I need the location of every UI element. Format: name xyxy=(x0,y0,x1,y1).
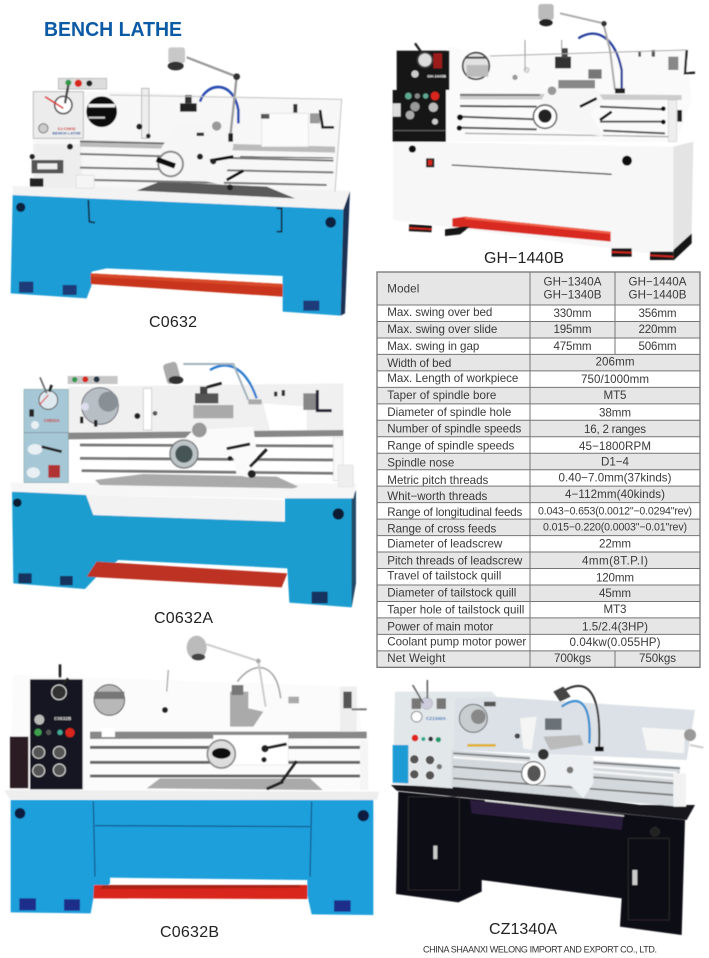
bed and rods xyxy=(452,750,686,807)
caption: GH-1440B: GH−1440B xyxy=(484,250,564,267)
row: pitch threads of leadscrew xyxy=(377,552,700,569)
row: max swing over slide: 195mm xyxy=(554,323,592,336)
row: max length of workpiece: 750/1000mm xyxy=(581,373,649,386)
row: range of longitudinal feeds: 0.043−0.653(0.0012"−0.0294"rev) xyxy=(538,505,692,517)
row: max swing in gap xyxy=(387,340,676,353)
row: max swing over slide: Max. swing over slide xyxy=(387,323,497,336)
row: power of main motor xyxy=(377,618,700,634)
bed and rods xyxy=(457,93,682,142)
chuck xyxy=(80,388,118,427)
row: max length of workpiece xyxy=(387,372,649,386)
machine: C0632A blue lathe xyxy=(10,361,357,607)
work lamp xyxy=(168,47,240,142)
row: max swing over bed: 330mm xyxy=(554,307,592,320)
coolant hose xyxy=(200,87,238,123)
row: range of longitudinal feeds xyxy=(387,505,692,519)
row: pitch threads of leadscrew: 4mm(8T.P.I) xyxy=(582,554,648,567)
headstock xyxy=(393,680,497,788)
coolant hose xyxy=(578,34,622,88)
headstock: BENCH LATHE xyxy=(53,131,81,136)
machine: GH-1440B white lathe xyxy=(393,4,695,261)
machine: CZ1340A black lathe xyxy=(391,680,703,935)
header row: GH−1440B xyxy=(628,288,687,301)
row: travel of tailstock quill: Travel of tailstock quill xyxy=(387,570,501,583)
row: max swing in gap: 506mm xyxy=(638,340,676,353)
headstock: EJ-C0632 xyxy=(58,126,76,131)
caption: C0632: C0632 xyxy=(149,314,197,331)
caption: CZ1340A: CZ1340A xyxy=(489,921,557,938)
row: number of spindle speeds xyxy=(377,420,700,437)
row: range of cross feeds: 0.015−0.220(0.0003"−0.01"rev) xyxy=(543,522,687,534)
machine: C0632 blue lathe xyxy=(11,47,350,316)
machine: C0632B blue lathe xyxy=(4,636,379,915)
coolant hose xyxy=(210,366,257,398)
row: whit-worth threads: 4−112mm(40kinds) xyxy=(565,488,665,501)
row: diameter of leadscrew: Diameter of leadscrew xyxy=(387,538,503,551)
tailstock xyxy=(261,104,334,147)
chuck xyxy=(463,53,489,79)
coolant hose xyxy=(562,701,590,743)
row: net weight: Net Weight xyxy=(387,652,446,665)
row: diameter of spindle hole: Diameter of spindle hole xyxy=(387,406,511,419)
steady rest xyxy=(515,717,537,750)
row: max swing over slide xyxy=(377,321,700,338)
control panels: GH-1440B xyxy=(427,74,446,79)
row: diameter of tailstock quill: Diameter of tailstock quill xyxy=(387,587,516,600)
cabinet: C0632B blue base xyxy=(11,800,373,915)
header row: Model xyxy=(387,282,419,295)
row: travel of tailstock quill xyxy=(387,570,634,585)
backsplash xyxy=(452,693,695,760)
bed and rods xyxy=(68,430,353,487)
row: width of bed: Width of bed xyxy=(387,357,451,370)
row: diameter of tailstock quill xyxy=(377,585,700,601)
row: net weight xyxy=(377,651,700,667)
carriage and handwheel xyxy=(170,383,267,478)
row: taper hole of tailstock quill: MT3 xyxy=(604,603,626,616)
row: width of bed: 206mm xyxy=(596,356,634,369)
work lamp xyxy=(162,361,262,404)
row: spindle nose xyxy=(377,453,700,470)
row: range of spindle speeds xyxy=(387,440,651,453)
tailstock xyxy=(642,727,703,753)
row: max swing over slide: 220mm xyxy=(638,323,676,336)
footer: CHINA SHAANXI WELONG IMPORT AND EXPORT CO., LTD. xyxy=(423,945,657,955)
header row: GH−1440A xyxy=(628,276,687,289)
row: range of cross feeds xyxy=(377,519,700,536)
row: diameter of leadscrew: 22mm xyxy=(599,538,631,551)
carriage and handwheel xyxy=(157,95,243,190)
row: power of main motor: 1.5/2.4(3HP) xyxy=(582,621,648,634)
row: diameter of tailstock quill: 45mm xyxy=(599,587,631,600)
row: metric pitch threads: 0.40−7.0mm(37kinds) xyxy=(558,472,672,485)
row: max length of workpiece: Max. Length of workpiece xyxy=(387,372,518,385)
tailstock xyxy=(638,50,695,73)
control panel xyxy=(10,664,83,789)
row: power of main motor: Power of main motor xyxy=(387,621,493,634)
row: diameter of spindle hole: 38mm xyxy=(599,407,631,420)
row: range of spindle speeds: 45−1800RPM xyxy=(579,440,651,453)
row: taper of spindle bore: MT5 xyxy=(604,389,626,402)
control panel: C0632B xyxy=(54,716,72,721)
caption: C0632A: C0632A xyxy=(154,610,213,627)
carriage and handwheel xyxy=(522,718,593,798)
chuck xyxy=(459,702,496,747)
tailstock xyxy=(263,390,332,430)
row: taper hole of tailstock quill: Taper hole of tailstock quill xyxy=(387,603,524,616)
work lamp xyxy=(187,636,266,707)
headstock: CZ1340A xyxy=(426,716,447,721)
row: number of spindle speeds: 16, 2 ranges xyxy=(584,423,646,436)
cabinet: GH-1440B white base xyxy=(393,142,673,257)
cabinet: C0632A blue base xyxy=(12,490,355,607)
row: metric pitch threads xyxy=(387,472,672,487)
header row xyxy=(377,272,700,305)
row: max swing in gap: 475mm xyxy=(554,340,592,353)
chuck xyxy=(86,96,117,127)
steady rest xyxy=(134,388,157,430)
row: diameter of leadscrew xyxy=(387,538,631,551)
header row: GH−1340A xyxy=(544,276,602,289)
carriage and handwheel xyxy=(207,685,299,789)
row: net weight: 750kgs xyxy=(639,652,676,665)
row: max swing over bed xyxy=(387,306,676,320)
row: coolant pump motor power: 0.04kw(0.055HP) xyxy=(570,636,661,649)
steady rest xyxy=(512,40,562,80)
row: travel of tailstock quill: 120mm xyxy=(596,572,634,585)
row: taper of spindle bore xyxy=(377,387,700,404)
carriage and handwheel xyxy=(533,48,612,137)
row: spindle nose: Spindle nose xyxy=(387,456,454,469)
control panel xyxy=(24,376,118,483)
work lamp xyxy=(553,686,604,751)
headstock xyxy=(30,78,107,187)
row: diameter of spindle hole xyxy=(387,406,631,420)
row: width of bed xyxy=(377,354,700,371)
row: taper hole of tailstock quill xyxy=(387,603,626,616)
work lamp xyxy=(538,4,625,93)
row: taper of spindle bore: Taper of spindle bore xyxy=(387,389,496,402)
cabinet: C0632 blue base xyxy=(11,195,343,316)
row: whit-worth threads: Whit−worth threads xyxy=(387,490,488,503)
steady rest xyxy=(162,670,168,713)
steady rest xyxy=(136,88,151,138)
row: range of longitudinal feeds: Range of longitudinal feeds xyxy=(387,506,523,519)
tailstock xyxy=(340,687,367,732)
row: coolant pump motor power xyxy=(387,636,661,649)
row: max swing over bed: 356mm xyxy=(638,307,676,320)
caption: C0632B: C0632B xyxy=(160,924,219,941)
bed and rods xyxy=(76,140,335,188)
row: range of spindle speeds: Range of spindle speeds xyxy=(387,440,515,453)
row: spindle nose: D1−4 xyxy=(601,456,630,469)
row: metric pitch threads: Metric pitch threads xyxy=(387,474,489,487)
header row: GH−1340B xyxy=(544,288,602,301)
title: BENCH LATHE xyxy=(44,19,182,41)
row: pitch threads of leadscrew: Pitch threads of leadscrew xyxy=(387,555,523,568)
cabinet: CZ1340A black base xyxy=(396,792,685,935)
row: number of spindle speeds: Number of spindle speeds xyxy=(387,423,522,436)
control panel: C0632A xyxy=(44,418,60,423)
row: whit-worth threads xyxy=(377,486,700,503)
chuck xyxy=(94,685,125,715)
row: max swing in gap: Max. swing in gap xyxy=(387,340,479,353)
bed and rods xyxy=(90,728,368,790)
row: range of cross feeds: Range of cross feeds xyxy=(387,523,497,536)
coolant hose xyxy=(237,668,281,698)
row: coolant pump motor power: Coolant pump motor power xyxy=(387,636,526,649)
spec table xyxy=(377,272,700,667)
control panels xyxy=(393,43,449,142)
row: net weight: 700kgs xyxy=(554,652,591,665)
row: max swing over bed: Max. swing over bed xyxy=(387,306,492,319)
